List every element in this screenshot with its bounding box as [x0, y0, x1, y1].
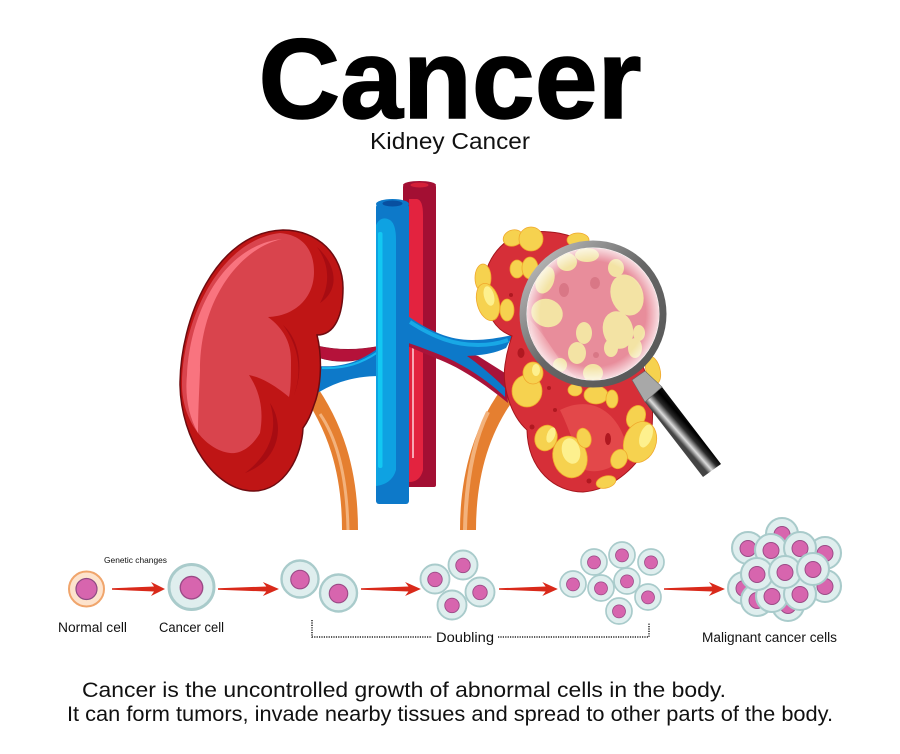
- doubling bracket: [312, 620, 649, 637]
- cell progression diagram: [58, 518, 841, 645]
- label: malignant cancer cells: Malignant cancer cells: [702, 630, 837, 645]
- normal cell: [69, 572, 104, 606]
- vena cava: [376, 199, 409, 504]
- tumorous kidney: [472, 227, 663, 492]
- kidney shadow folds: [245, 247, 334, 473]
- description: [67, 679, 833, 726]
- magnifying glass: [523, 244, 721, 477]
- arrow 1: [112, 582, 165, 596]
- arrow 4: [499, 582, 558, 596]
- right ureter: [465, 386, 514, 530]
- left ureter: [306, 385, 350, 530]
- subtitle: Kidney Cancer: [370, 128, 530, 154]
- handle collar: [632, 371, 662, 402]
- label: cancer cell: Cancer cell: [159, 620, 224, 635]
- lens view: [527, 248, 659, 385]
- kidney anatomy illustration: [180, 181, 721, 530]
- handle: [645, 387, 721, 477]
- arrow 2: [218, 582, 279, 596]
- arrow 5: [664, 582, 725, 596]
- description: Cancer is the uncontrolled growth of abnormal cells in the body.: [82, 679, 726, 702]
- renal vein left: [316, 347, 380, 394]
- title: Cancer: [258, 16, 642, 142]
- lens rim: [523, 244, 663, 384]
- description: It can form tumors, invade nearby tissues and spread to other parts of the body.: [67, 703, 833, 726]
- eight cells: [560, 542, 664, 624]
- label: normal cell: Normal cell: [58, 620, 127, 635]
- arrow 3: [361, 582, 421, 596]
- malignant cell cluster: [728, 518, 841, 621]
- tumorous kidney body: [484, 231, 653, 492]
- aorta: [403, 181, 436, 487]
- healthy kidney: [180, 230, 343, 491]
- label: doubling: Doubling: [436, 630, 494, 645]
- renal veins right: [405, 314, 513, 397]
- cancer cell: [169, 564, 214, 610]
- tumor shading: [560, 404, 626, 471]
- yellow tumors: [472, 227, 663, 490]
- renal artery right: [405, 338, 508, 403]
- two cells: [282, 560, 357, 612]
- tumor spots: [509, 293, 611, 484]
- renal artery left: [318, 346, 380, 361]
- kidney cortex: [182, 233, 314, 453]
- four cells: [420, 550, 494, 620]
- label: genetic changes: Genetic changes: [104, 555, 167, 565]
- kidney highlight: [186, 239, 282, 433]
